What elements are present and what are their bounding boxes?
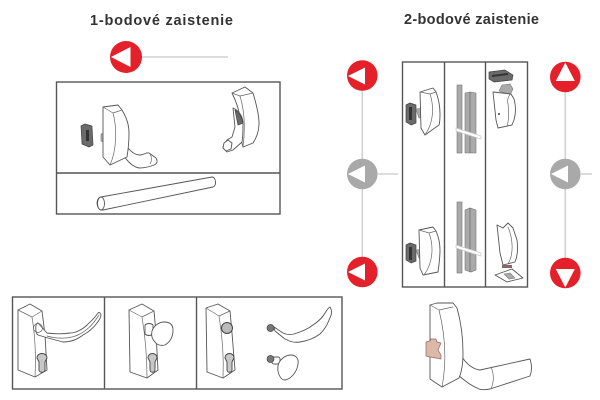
icon: knob on plate <box>129 304 173 378</box>
icon: lever handle on plate <box>18 304 101 377</box>
icon: red arrow top left <box>347 60 378 91</box>
icon: red arrow bottom left <box>347 257 378 287</box>
indicator: left rail with arrows <box>347 60 398 287</box>
icon: bottom latch and strike <box>495 223 523 282</box>
icon: red arrow down <box>550 258 581 288</box>
panel: handle options <box>12 297 342 389</box>
indicator: right rail with arrows <box>550 62 592 288</box>
icon: panic device rear view <box>223 87 259 152</box>
icon: panic device with strike <box>81 105 157 168</box>
icon: upper rods <box>456 85 481 153</box>
icon: horizontal bar <box>97 177 216 210</box>
icon: lower rods <box>456 202 481 273</box>
icon: grey arrow left right side <box>550 159 581 189</box>
icon: lower device with strike <box>406 227 440 275</box>
icon: plate with interchangeable handles <box>206 304 235 378</box>
panel: 2-point devices <box>402 62 528 287</box>
title: 2-point locking: 2-bodové zaistenie <box>404 12 539 28</box>
icon: upper device with strike <box>406 88 440 135</box>
icon: grey arrow left <box>347 159 378 189</box>
indicator: 1-point red arrow <box>110 41 228 73</box>
title: 1-point locking: 1-bodové zaistenie <box>90 13 233 29</box>
icon: loose knob <box>267 355 298 380</box>
icon: top latch and strike <box>489 70 516 128</box>
icon: red arrow up <box>550 62 581 92</box>
panel: 1-point devices <box>56 82 280 214</box>
icon: loose lever <box>267 307 332 342</box>
icon: panic device with lever and pink latch <box>426 303 532 390</box>
